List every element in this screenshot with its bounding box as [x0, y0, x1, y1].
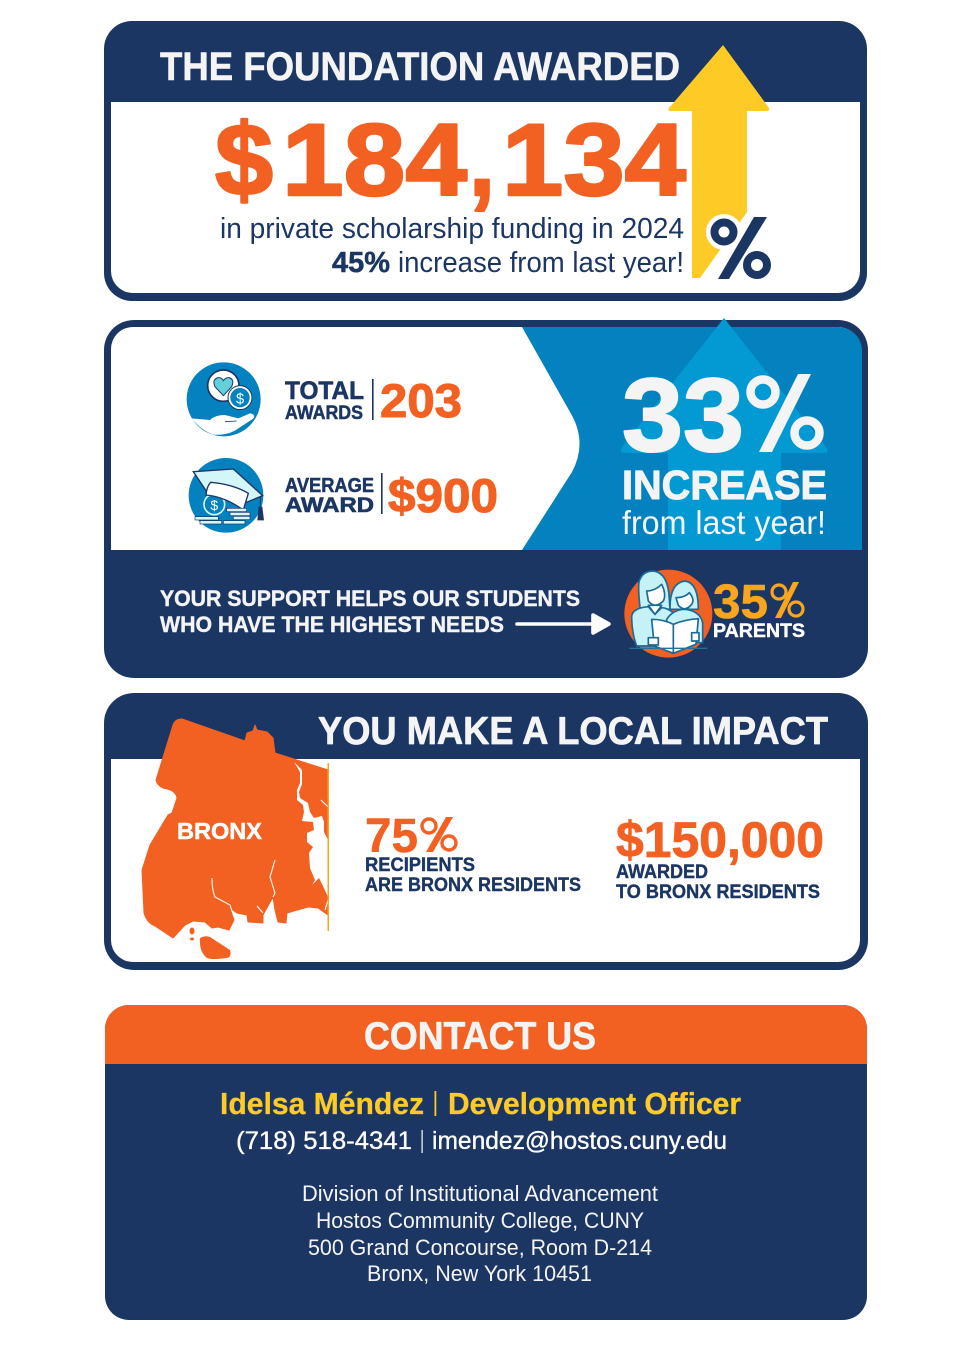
- heading: contact us: CONTACT US: [364, 1015, 596, 1058]
- heading: you make a local impact: YOU MAKE A LOCAL IMPACT: [318, 710, 828, 753]
- heading: the foundation awarded: THE FOUNDATION AWARDED: [160, 45, 680, 89]
- blue increase section: [522, 318, 862, 550]
- icon: yellow up arrow: [668, 45, 769, 278]
- amount: $184,134: 134: [502, 103, 686, 217]
- stat: 75% recipients: 75: [365, 810, 418, 863]
- stat: total awards: 203: [380, 374, 462, 427]
- stat: $150,000 awarded: AWARDED: [616, 861, 708, 883]
- text: phone and email: imendez@hostos.cuny.edu: [432, 1127, 727, 1155]
- stat: 35% parents: [713, 576, 805, 642]
- panel: contact us: [105, 1005, 867, 1320]
- text: your support: [160, 586, 580, 637]
- text: increase: INCREASE: [622, 462, 827, 508]
- icon: graduation cap with coins: $: [210, 497, 218, 513]
- stat: average award: AVERAGE: [285, 475, 374, 497]
- amount: $184,134: ,: [469, 103, 495, 217]
- text: private scholarship funding: in private scholarship funding in 2024: [220, 213, 684, 245]
- icon: parent and child reading: [624, 570, 712, 658]
- icon: graduation cap with coins: [189, 458, 264, 533]
- text: 45% increase: increase from last year!: [398, 247, 684, 279]
- stat: 35% parents: 35: [713, 576, 768, 629]
- panel: foundation awarded: [104, 21, 867, 301]
- stat: 33%: [622, 358, 820, 474]
- text: phone and email: (718) 518-4341: [236, 1127, 412, 1155]
- stat: 33%: 33: [622, 358, 744, 474]
- text: address: Division of Institutional Advancement: [302, 1181, 658, 1206]
- stat: 35% parents: PARENTS: [713, 621, 805, 642]
- text: contact name and title: [220, 1086, 741, 1121]
- text: contact name and title: Development Officer: [448, 1086, 741, 1121]
- amount: $184,134: [215, 103, 686, 217]
- text: address: Hostos Community College, CUNY: [316, 1208, 644, 1233]
- stat: total awards: TOTAL: [285, 377, 364, 405]
- stat: total awards: AWARDS: [285, 403, 363, 424]
- amount: $184,134: 184: [282, 103, 467, 217]
- text: your support: YOUR SUPPORT HELPS OUR STUDENTS: [160, 586, 580, 611]
- label: bronx: BRONX: [177, 818, 263, 844]
- text: address: 500 Grand Concourse, Room D-214: [308, 1235, 652, 1260]
- text: address: Bronx, New York 10451: [367, 1261, 592, 1286]
- text: address: [302, 1181, 658, 1286]
- icon: hand with heart and coin: [187, 362, 261, 436]
- arrow: to parents: [517, 615, 609, 633]
- icon: light blue arrow: [621, 318, 828, 550]
- panel: local impact: [104, 693, 868, 970]
- text: phone and email: [236, 1127, 727, 1155]
- panel: awards and increase: [104, 318, 868, 678]
- icon: hand with heart and coin: $: [236, 391, 244, 407]
- text: contact name and title: Idelsa Méndez: [220, 1086, 424, 1121]
- map: bronx: [142, 719, 329, 959]
- stat: average award: AWARD: [285, 494, 374, 517]
- stat: 75% recipients: [365, 810, 581, 896]
- amount: $184,134: $: [215, 103, 273, 217]
- text: your support: WHO HAVE THE HIGHEST NEEDS: [160, 612, 504, 637]
- stat: 75% recipients: RECIPIENTS: [365, 854, 475, 876]
- stat: $150,000 awarded: TO BRONX RESIDENTS: [616, 881, 820, 903]
- stat: $150,000 awarded: [616, 812, 824, 903]
- icon: percent sign: [706, 214, 767, 279]
- stat: average award: [285, 469, 498, 522]
- text: 45% increase: 45%: [332, 247, 390, 279]
- stat: average award: $900: [388, 469, 498, 522]
- stat: 75% recipients: ARE BRONX RESIDENTS: [365, 874, 581, 896]
- stat: total awards: [285, 374, 462, 427]
- text: from last year: from last year!: [622, 504, 826, 541]
- stat: $150,000 awarded: $150,000: [616, 812, 824, 868]
